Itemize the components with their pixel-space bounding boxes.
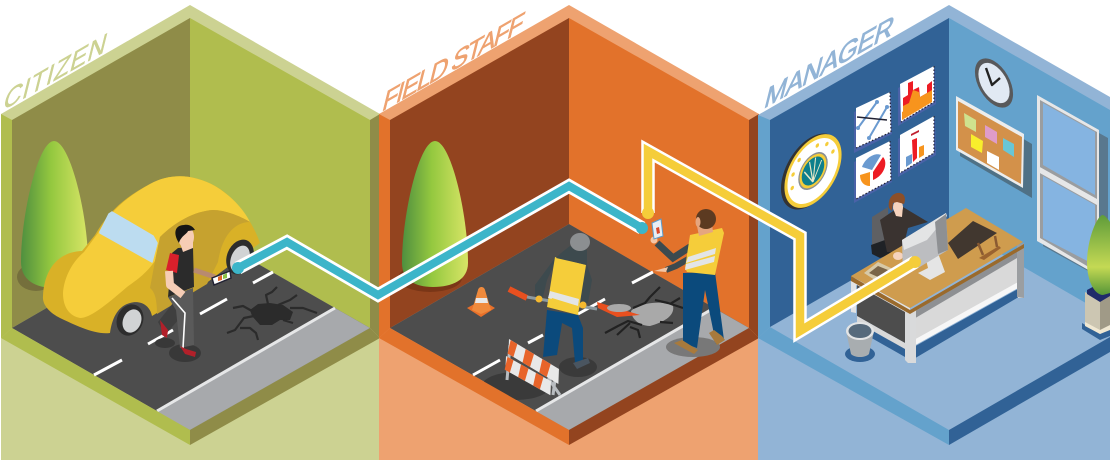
panel: field staff — [379, 5, 759, 460]
icon: yellow car — [43, 176, 260, 340]
worker with tablet — [650, 209, 725, 357]
icon: waste bin — [845, 322, 875, 362]
desk — [851, 208, 1024, 363]
icon: tree — [398, 141, 468, 292]
manager figure — [880, 193, 928, 252]
icon: tree — [17, 141, 88, 291]
flow line: field staff to manager — [642, 151, 921, 331]
chart poster: line diagram — [854, 92, 892, 153]
road dashes — [473, 272, 653, 375]
paper tray — [864, 262, 893, 282]
bulletin board — [956, 96, 1032, 198]
panel: citizen — [0, 5, 380, 460]
worker with shovel — [509, 233, 640, 377]
icon: office chair — [871, 207, 897, 258]
field staff room shell — [379, 5, 759, 460]
icon: road pothole — [227, 287, 317, 340]
heading: field staff: FIELD STAFF — [379, 5, 528, 119]
heading: citizen: CITIZEN — [0, 26, 111, 118]
road dashes — [94, 272, 273, 375]
manager at desk with computer — [851, 193, 1024, 363]
icon: circular emblem — [781, 120, 842, 222]
flow line: citizen to field staff — [232, 186, 648, 295]
hand on desk — [893, 252, 903, 260]
window — [1037, 95, 1108, 282]
sticky notes — [964, 113, 1014, 170]
desk shadow — [868, 289, 1022, 360]
heading: manager: MANAGER — [761, 8, 898, 116]
computer monitor — [902, 213, 948, 280]
icon: road barrier — [505, 338, 560, 395]
panel: manager — [758, 5, 1110, 460]
icon: traffic cone — [467, 287, 495, 317]
potted plant — [1082, 215, 1110, 340]
manager room shell — [758, 5, 1110, 460]
citizen room shell — [1, 5, 380, 460]
desk pad with stand — [948, 221, 1001, 260]
citizen figure with phone — [155, 225, 231, 362]
chart poster: pie chart — [854, 141, 892, 203]
icon: wall clock — [975, 50, 1013, 116]
icon: repaired pothole — [605, 287, 683, 338]
chart poster: bar chart — [898, 66, 936, 126]
chart poster: column chart — [898, 116, 936, 177]
